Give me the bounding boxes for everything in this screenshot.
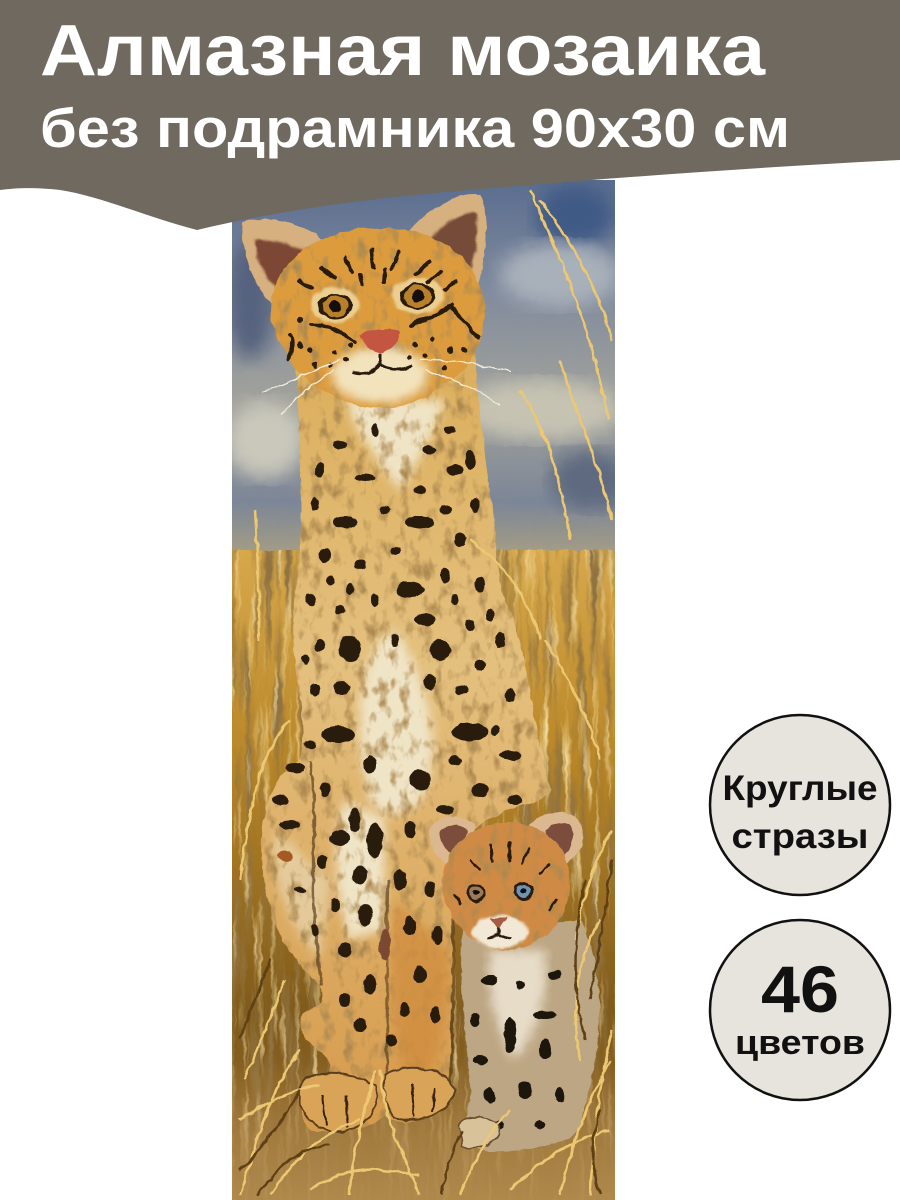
savanna field	[222, 550, 625, 1200]
sky	[232, 180, 615, 552]
muzzle	[332, 347, 428, 403]
body spots	[272, 423, 522, 1046]
badge: 46 colours: цветов	[735, 1024, 865, 1062]
chest	[336, 400, 445, 940]
cub body	[461, 920, 600, 1151]
head	[242, 194, 510, 415]
cub ears	[429, 816, 476, 864]
paws	[299, 1068, 455, 1132]
badge: 46 colours	[710, 920, 890, 1100]
cub spots	[470, 971, 565, 1130]
cub face	[442, 822, 570, 950]
nose	[360, 330, 400, 354]
badge: 46 colours: 46	[761, 952, 839, 1026]
cub	[430, 813, 600, 1151]
facial markings	[288, 250, 478, 358]
eyes	[318, 293, 352, 319]
mother cheetah	[242, 194, 550, 1132]
badge: round rhinestones	[710, 715, 890, 895]
title: Алмазная мозаика	[40, 11, 766, 91]
body	[262, 350, 550, 1132]
ears	[242, 219, 322, 312]
leg shading	[310, 760, 454, 1100]
whiskers	[262, 360, 510, 415]
badge: round rhinestones: Круглые	[722, 769, 878, 808]
subtitle: без подрамника 90х30 см	[40, 97, 790, 159]
badge: round rhinestones: стразы	[732, 817, 868, 856]
painting: cheetah and cub in the savanna	[222, 170, 630, 1200]
face	[270, 228, 484, 408]
fur texture	[262, 350, 550, 1132]
header banner	[0, 0, 900, 230]
foreground grass	[240, 190, 612, 1195]
